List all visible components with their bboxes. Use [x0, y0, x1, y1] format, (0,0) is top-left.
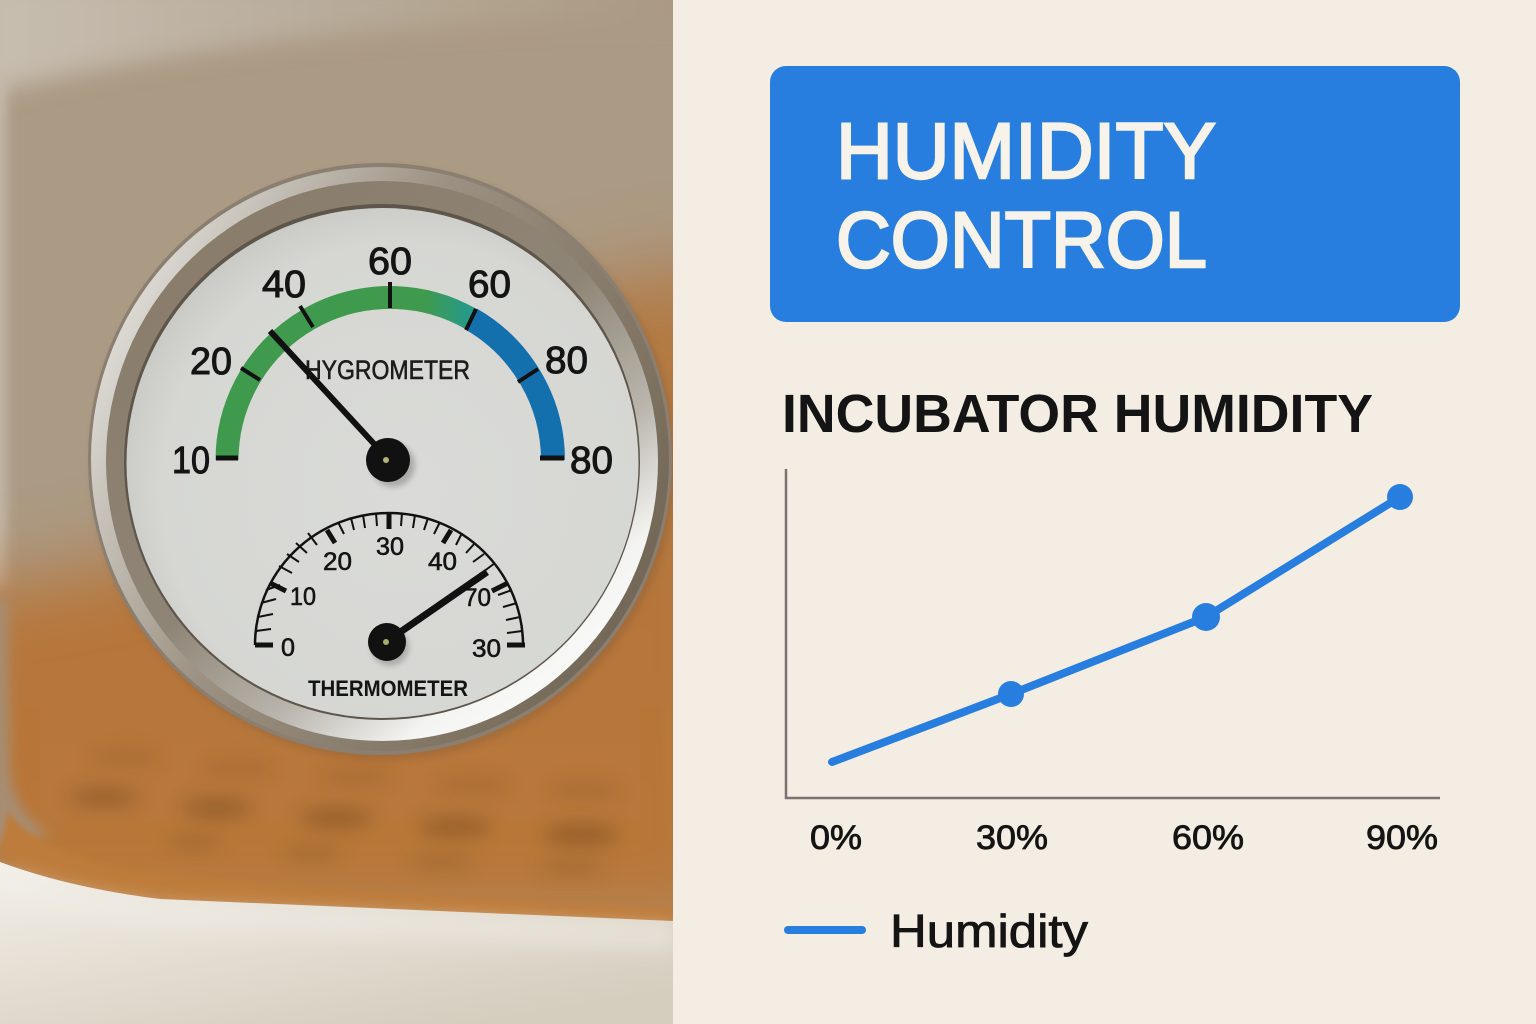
title text [836, 106, 1216, 284]
scale ticks [216, 282, 564, 458]
banner background [770, 66, 1460, 322]
incubator wall background [0, 0, 673, 921]
thermometer numbers: 20 [323, 548, 352, 576]
gauge bright bevel [91, 167, 669, 751]
scale numbers: 40 [262, 264, 306, 306]
thermometer hub [368, 623, 409, 666]
upper wall light band [0, 0, 523, 97]
bezel shadow line [124, 204, 640, 720]
scale numbers [172, 241, 613, 482]
thermometer needle [400, 569, 489, 634]
scale numbers: 20 [190, 341, 232, 383]
thermometer numbers: 70 [464, 584, 491, 612]
gauge: hygrometer and thermometer dial [88, 163, 676, 760]
blue arc [471, 319, 553, 460]
legend swatch [788, 926, 862, 934]
hygrometer hub [366, 438, 415, 487]
incubator tray [0, 265, 740, 930]
gauge inner bezel [106, 181, 658, 741]
green arc [227, 297, 471, 460]
title text: CONTROL [836, 195, 1207, 284]
chart heading: INCUBATOR HUMIDITY [782, 384, 1373, 444]
x-axis labels: 0% [810, 819, 862, 857]
x-axis labels: 90% [1366, 819, 1438, 857]
gauge drop shadow [143, 272, 673, 760]
thermometer numbers: 40 [428, 548, 457, 576]
title banner [770, 66, 1460, 322]
gauge outer rim [88, 163, 672, 755]
scale numbers: 60 [368, 241, 412, 283]
chart axes [786, 469, 1440, 798]
x-axis labels: 60% [1172, 819, 1244, 857]
scale numbers: 60 [468, 264, 511, 306]
dial face [126, 208, 638, 718]
tray rim [0, 810, 673, 925]
scale numbers: 80 [570, 440, 613, 482]
thermometer numbers: 30 [472, 635, 501, 663]
tray dimples [70, 748, 621, 872]
x-axis labels [810, 819, 1438, 857]
thermometer numbers: 30 [376, 533, 404, 561]
hygrometer needle [268, 329, 376, 446]
tray left wall [0, 600, 50, 850]
thermometer ticks [255, 513, 525, 645]
thermometer numbers [281, 533, 501, 663]
scale numbers: 10 [172, 440, 210, 482]
humidity line [832, 497, 1400, 762]
thermometer numbers: 10 [290, 583, 316, 611]
thermometer arc [255, 513, 523, 645]
data points [998, 484, 1413, 707]
x-axis labels: 30% [976, 819, 1048, 857]
hygrometer scale [172, 241, 613, 487]
hygrometer label: HYGROMETER [305, 355, 470, 385]
thermometer scale [255, 513, 525, 701]
thermometer numbers: 0 [281, 634, 295, 662]
line chart: humidity [786, 469, 1440, 857]
scale numbers: 80 [545, 340, 588, 382]
thermometer label: THERMOMETER [308, 676, 468, 701]
wall left light strip [0, 70, 6, 590]
title text: HUMIDITY [836, 106, 1216, 195]
base top highlight [0, 866, 673, 950]
panel: incubator photo [0, 0, 740, 1024]
legend label: Humidity [890, 905, 1088, 957]
white incubator base [0, 862, 673, 1024]
